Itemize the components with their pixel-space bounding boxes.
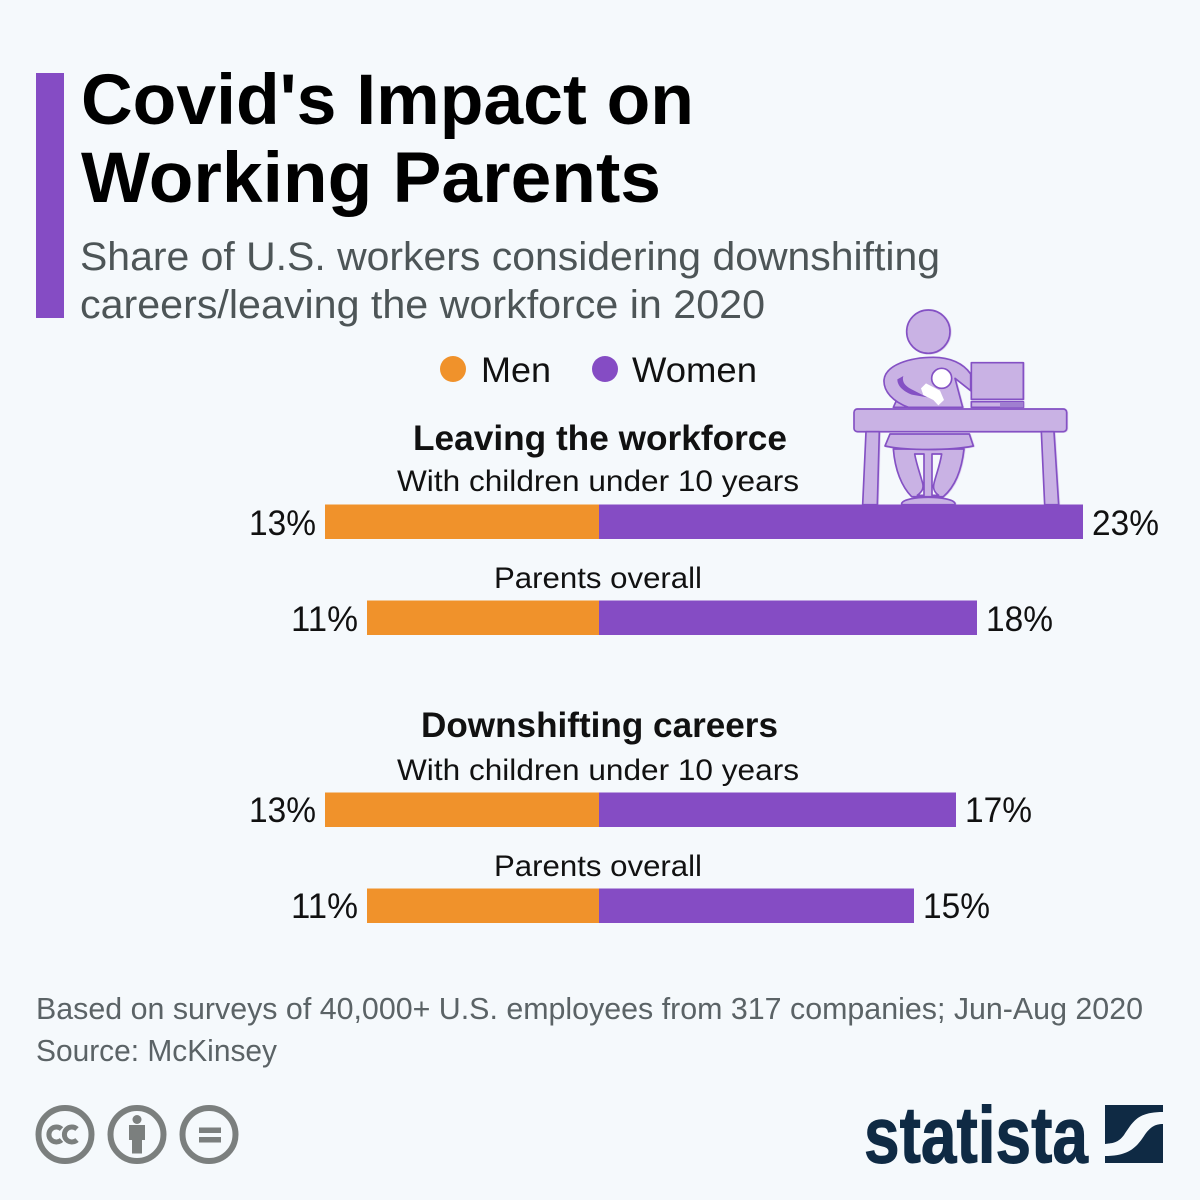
label: parents overall: Parents overall xyxy=(494,562,702,595)
bar row: leaving, children under 10: 23% xyxy=(1092,504,1159,543)
bar row: leaving, children under 10: 13% xyxy=(249,504,316,543)
subtitle: Share of U.S. workers considering downshifting xyxy=(80,235,940,279)
title: Working Parents xyxy=(81,139,661,218)
title accent bar xyxy=(36,73,64,318)
bar row: downshifting, children under 10 xyxy=(249,791,1032,830)
section heading: leaving the workforce: Leaving the workforce xyxy=(413,419,787,458)
bar row: leaving, children under 10 xyxy=(249,504,1159,543)
bar row: leaving, parents overall: 11% xyxy=(291,600,358,639)
bar row: downshifting, parents overall: 15% xyxy=(923,887,990,926)
label: with children under 10: With children under 10 years xyxy=(397,465,799,498)
statista logo: statista xyxy=(864,1090,1088,1180)
label: parents overall: Parents overall xyxy=(494,850,702,883)
source note xyxy=(36,991,1143,1068)
legend: Women xyxy=(632,351,757,390)
bar row: downshifting, children under 10: 17% xyxy=(965,791,1032,830)
bar row: leaving, parents overall: 18% xyxy=(986,600,1053,639)
bar row: downshifting, parents overall xyxy=(291,887,990,926)
subtitle xyxy=(80,235,940,327)
title xyxy=(81,61,694,218)
subtitle: careers/leaving the workforce in 2020 xyxy=(80,283,765,327)
legend xyxy=(440,351,757,390)
title: Covid's Impact on xyxy=(81,61,694,140)
source note: Based on surveys of 40,000+ U.S. employees from 317 companies; Jun-Aug 2020 xyxy=(36,991,1143,1026)
icon: creative commons CC xyxy=(38,1108,92,1161)
source note: Source: McKinsey xyxy=(36,1033,277,1068)
legend: Men xyxy=(481,351,551,390)
label: with children under 10: With children under 10 years xyxy=(397,754,799,787)
icon: no derivatives xyxy=(182,1108,236,1161)
bar row: leaving, parents overall xyxy=(291,600,1053,639)
icon: parent holding baby at laptop desk xyxy=(854,310,1067,505)
bar row: downshifting, parents overall: 11% xyxy=(291,887,358,926)
icon: attribution xyxy=(110,1108,164,1161)
bar row: downshifting, children under 10: 13% xyxy=(249,791,316,830)
section heading: downshifting careers: Downshifting careers xyxy=(421,706,778,745)
